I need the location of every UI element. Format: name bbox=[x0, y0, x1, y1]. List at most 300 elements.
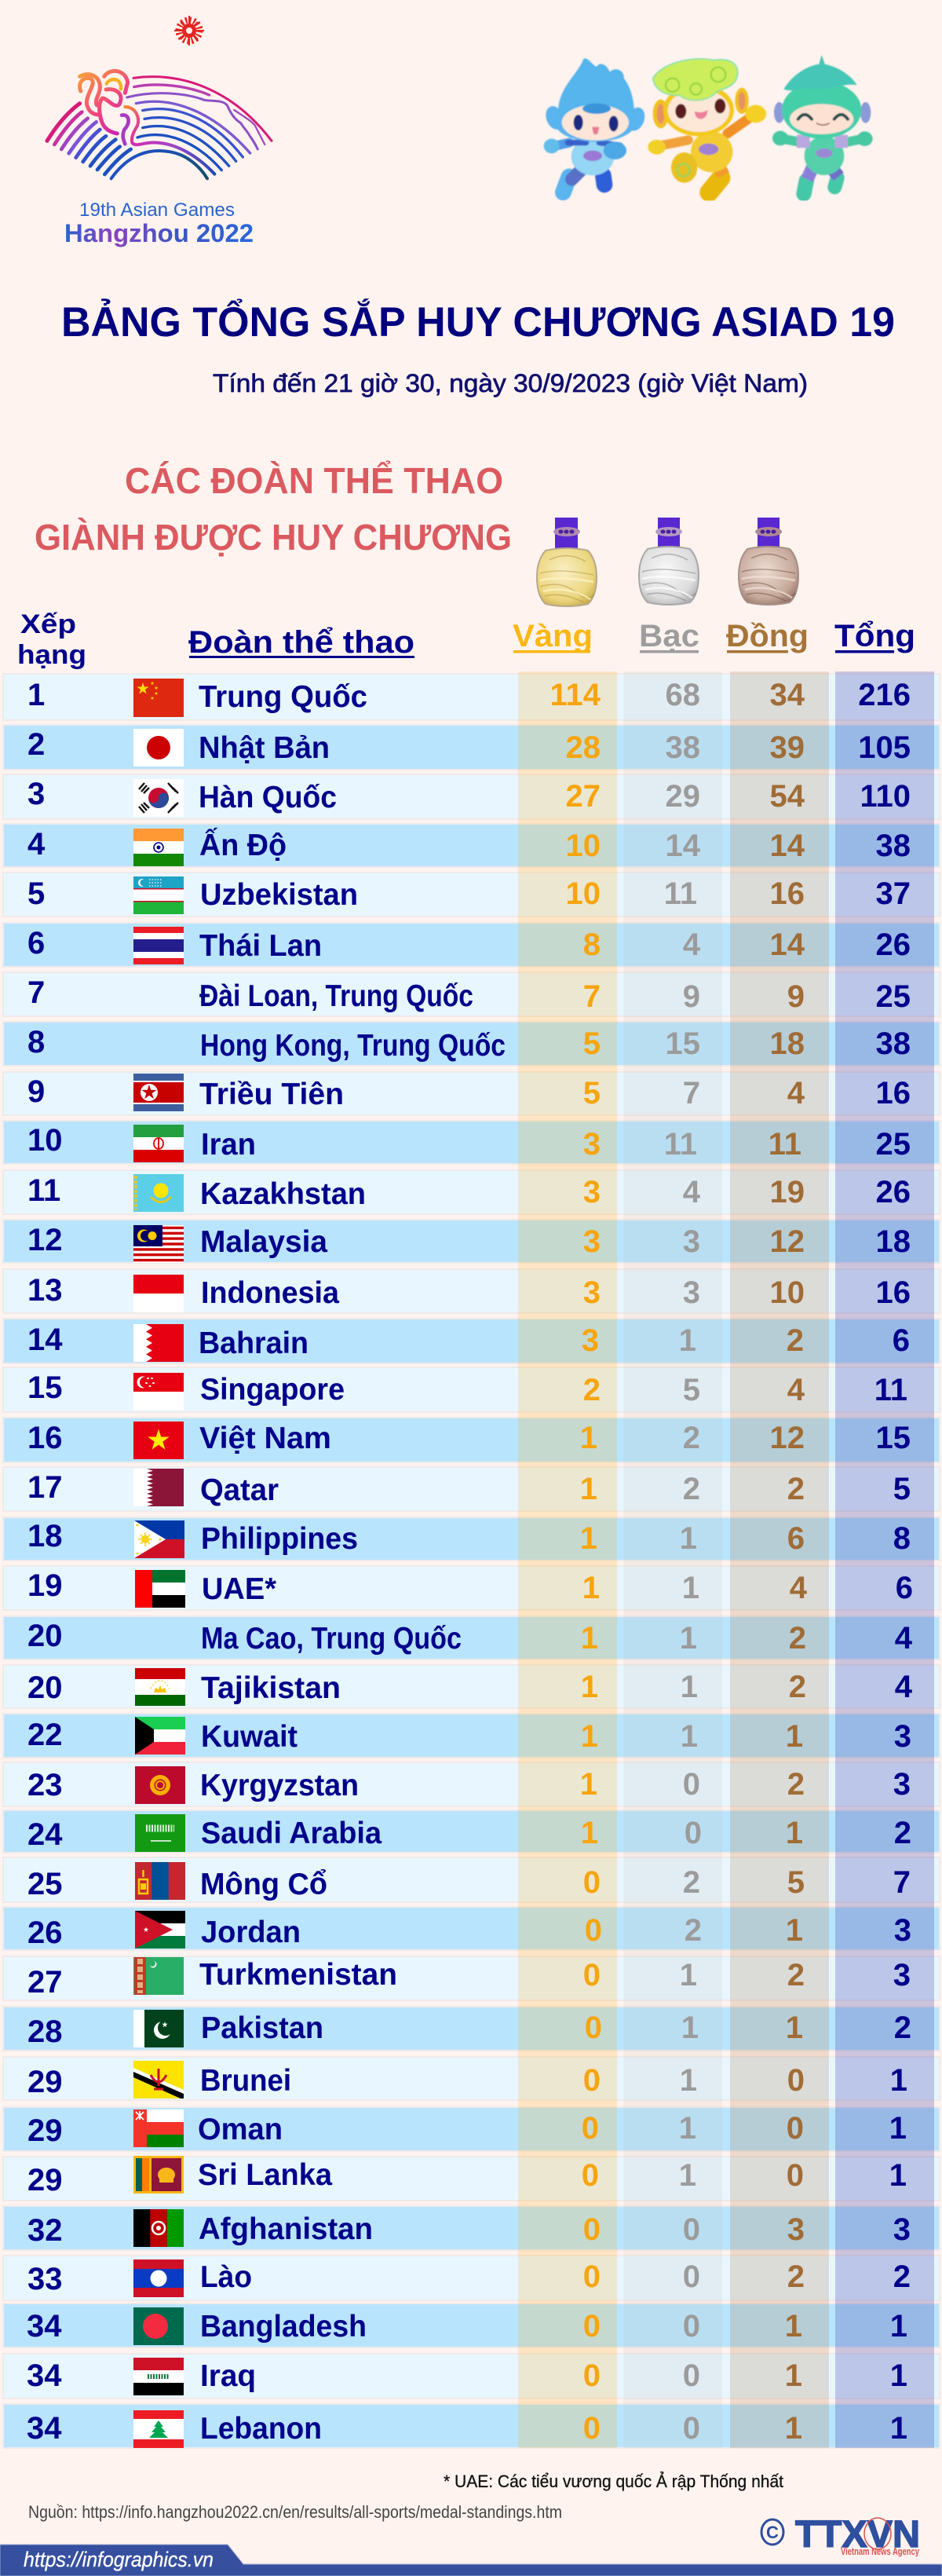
row: 19 UAE: 1 bbox=[682, 1571, 699, 1605]
row: 12 Malaysia: Malaysia bbox=[200, 1225, 327, 1259]
row: 25 Mông Cổ: 5 bbox=[787, 1865, 805, 1900]
row: 14 Bahrain bbox=[27, 1323, 910, 1362]
row: 16 Việt Nam: 2 bbox=[683, 1421, 700, 1455]
row: 27 Turkmenistan: Turkmenistan bbox=[199, 1958, 397, 1992]
row: 16 Việt Nam: Việt Nam bbox=[199, 1422, 331, 1455]
row: 34 Bangladesh: 34 bbox=[27, 2309, 62, 2344]
header: Đồng: Đồng bbox=[726, 619, 809, 653]
row: 23 Kyrgyzstan: Kyrgyzstan bbox=[200, 1769, 359, 1802]
row: 29 Oman: 0 bbox=[582, 2111, 599, 2146]
row: 22 Kuwait: 1 bbox=[681, 1719, 698, 1754]
row: 4 Ấn Độ: 14 bbox=[769, 829, 805, 863]
row: 15 Singapore: 5 bbox=[683, 1373, 700, 1407]
row: 34 Iraq: 1 bbox=[785, 2358, 802, 2393]
row: 10 Iran: Iran bbox=[201, 1128, 256, 1162]
row: 8 Hong Kong, Trung Quốc bbox=[27, 1025, 911, 1063]
header: Bạc: Bạc bbox=[639, 619, 699, 653]
row: 12 Malaysia: 3 bbox=[583, 1224, 601, 1259]
flag: Tajikistan bbox=[135, 1668, 185, 1706]
flag: Saudi Arabia bbox=[135, 1814, 185, 1852]
row: 2 Nhật Bản: 38 bbox=[666, 730, 700, 765]
flag: Turkmenistan bbox=[133, 1957, 184, 1995]
row: 32 Afghanistan: 3 bbox=[893, 2212, 911, 2247]
row: 1 Trung Quốc: 68 bbox=[666, 678, 700, 712]
table row backgrounds bbox=[3, 674, 940, 2448]
row: 11 Kazakhstan: Kazakhstan bbox=[200, 1177, 366, 1211]
row: 14 Bahrain: 14 bbox=[27, 1323, 63, 1357]
row: 28 Pakistan bbox=[27, 2010, 911, 2049]
footer bar bbox=[0, 2545, 942, 2576]
row: 20 Ma Cao, Trung Quốc: 20 bbox=[27, 1619, 63, 1653]
row: 14 Bahrain: 6 bbox=[893, 1323, 910, 1358]
row: 23 Kyrgyzstan bbox=[27, 1766, 911, 1804]
row: 18 Philippines: 6 bbox=[787, 1521, 805, 1556]
row: 8 Hong Kong, Trung Quốc: Hong Kong, Trung Quốc bbox=[200, 1029, 506, 1063]
row: 18 Philippines: 1 bbox=[680, 1521, 697, 1556]
row: 11 Kazakhstan: 4 bbox=[683, 1175, 701, 1209]
row: 29 Oman: 1 bbox=[679, 2111, 696, 2146]
row: 10 Iran: 25 bbox=[876, 1127, 911, 1162]
row: 22 Kuwait: 1 bbox=[786, 1719, 803, 1754]
row: 34 Iraq: Iraq bbox=[200, 2359, 256, 2393]
row: 29 Sri Lanka bbox=[27, 2156, 907, 2197]
row: 7 Đài Loan, Trung Quốc: Đài Loan, Trung Quốc bbox=[199, 979, 473, 1013]
row: 28 Pakistan: 2 bbox=[894, 2011, 911, 2045]
row: 5 Uzbekistan bbox=[27, 876, 911, 914]
row: 29 Brunei: 1 bbox=[890, 2063, 907, 2098]
subtitle: Tính đến 21 giờ 30, ngày 30/9/2023 (giờ Việt Nam) bbox=[213, 369, 808, 397]
row: 34 Lebanon: 34 bbox=[27, 2411, 62, 2446]
row: 23 Kyrgyzstan: 2 bbox=[787, 1767, 805, 1802]
icon: silver medal bbox=[639, 518, 699, 605]
row: 15 Singapore: 2 bbox=[583, 1373, 601, 1407]
table header bbox=[17, 609, 915, 670]
row: 13 Indonesia: 3 bbox=[583, 1275, 601, 1310]
row: 17 Qatar bbox=[27, 1469, 911, 1507]
row: 11 Kazakhstan: 19 bbox=[769, 1175, 805, 1209]
header: Xếp hạng bbox=[17, 609, 86, 670]
flag: Iran bbox=[133, 1125, 184, 1162]
row: 24 Saudi Arabia: 2 bbox=[894, 1816, 911, 1850]
flag: Laos bbox=[133, 2259, 184, 2297]
row: 4 Ấn Độ: 4 bbox=[27, 827, 46, 862]
row: 24 Saudi Arabia: Saudi Arabia bbox=[201, 1817, 382, 1850]
row: 6 Thái Lan: 6 bbox=[27, 926, 45, 961]
row: 34 Bangladesh: 1 bbox=[785, 2309, 802, 2344]
flag: Iraq bbox=[133, 2358, 184, 2395]
flag: Indonesia bbox=[133, 1275, 184, 1312]
row: 17 Qatar: 17 bbox=[27, 1470, 63, 1505]
flag: Kazakhstan bbox=[133, 1174, 184, 1212]
row: 32 Afghanistan: 0 bbox=[683, 2212, 700, 2247]
row: 25 Mông Cổ: 0 bbox=[583, 1865, 601, 1900]
row: 20 Tajikistan: 20 bbox=[27, 1670, 63, 1705]
flag: Pakistan bbox=[133, 2010, 184, 2047]
row: 13 Indonesia: Indonesia bbox=[201, 1276, 339, 1310]
row: 3 Hàn Quốc: 110 bbox=[860, 779, 911, 814]
flag: Oman bbox=[133, 2109, 184, 2147]
header: Tổng: Tổng bbox=[834, 619, 915, 653]
row: 12 Malaysia: 12 bbox=[769, 1224, 805, 1259]
row: 25 Mông Cổ: 25 bbox=[27, 1867, 63, 1901]
section heading bbox=[35, 460, 512, 558]
row: 29 Sri Lanka: Sri Lanka bbox=[198, 2158, 332, 2192]
row: 29 Brunei: Brunei bbox=[200, 2064, 291, 2098]
flag: Philippines bbox=[134, 1520, 184, 1558]
row: 16 Việt Nam: 12 bbox=[769, 1421, 805, 1455]
row: 7 Đài Loan, Trung Quốc: 7 bbox=[583, 979, 601, 1014]
row: 4 Ấn Độ bbox=[27, 827, 911, 866]
row: 27 Turkmenistan: 27 bbox=[27, 1965, 63, 2000]
row: 20 Tajikistan bbox=[27, 1668, 913, 1706]
row: 28 Pakistan: 28 bbox=[27, 2014, 63, 2049]
header: Đoàn thể thao: Đoàn thể thao bbox=[188, 625, 414, 660]
row: 3 Hàn Quốc: 29 bbox=[666, 779, 700, 814]
row: 33 Lào: 0 bbox=[583, 2259, 601, 2294]
flag: Viet Nam bbox=[133, 1422, 184, 1459]
row: 1 Trung Quốc bbox=[27, 678, 911, 717]
row: 17 Qatar: 2 bbox=[683, 1472, 700, 1506]
flag: Sri Lanka bbox=[133, 2156, 184, 2194]
row: 15 Singapore: 11 bbox=[874, 1373, 907, 1407]
flag: Japan bbox=[133, 729, 184, 767]
row: 12 Malaysia: 18 bbox=[876, 1224, 911, 1259]
flag: Bangladesh bbox=[133, 2307, 184, 2345]
row: 7 Đài Loan, Trung Quốc bbox=[27, 975, 911, 1014]
row: 20 Tajikistan: Tajikistan bbox=[201, 1671, 341, 1705]
row: 2 Nhật Bản: 39 bbox=[769, 730, 805, 765]
row: 12 Malaysia: 3 bbox=[683, 1224, 700, 1259]
flag: Afghanistan bbox=[133, 2209, 184, 2247]
row: 18 Philippines: 1 bbox=[580, 1521, 597, 1556]
row: 34 Bangladesh: 0 bbox=[683, 2309, 700, 2344]
row: 24 Saudi Arabia: 1 bbox=[581, 1816, 598, 1850]
flag: India bbox=[133, 829, 184, 866]
row: 32 Afghanistan: 3 bbox=[787, 2212, 805, 2247]
row: 20 Tajikistan: 1 bbox=[581, 1670, 598, 1704]
row: 14 Bahrain: Bahrain bbox=[199, 1326, 309, 1360]
row: 23 Kyrgyzstan: 1 bbox=[580, 1767, 597, 1802]
row: 25 Mông Cổ: 2 bbox=[683, 1865, 700, 1900]
row: 32 Afghanistan: 0 bbox=[583, 2212, 601, 2247]
row: 17 Qatar: 5 bbox=[893, 1472, 911, 1506]
row: 20 Ma Cao, Trung Quốc: 1 bbox=[680, 1621, 697, 1656]
flag: Mongolia bbox=[135, 1862, 185, 1900]
row: 13 Indonesia: 13 bbox=[27, 1273, 63, 1308]
flag: Kuwait bbox=[135, 1717, 185, 1755]
icon: Asian Games sun emblem bbox=[174, 16, 204, 46]
row: 19 UAE: 19 bbox=[27, 1568, 63, 1603]
row: 28 Pakistan: 1 bbox=[786, 2011, 803, 2045]
row: 29 Brunei: 0 bbox=[787, 2063, 805, 2098]
row: 10 Iran: 11 bbox=[664, 1127, 697, 1162]
icon: bronze medal bbox=[739, 518, 798, 605]
row: 34 Bangladesh: Bangladesh bbox=[200, 2310, 367, 2344]
footer bar: https://infographics.vn bbox=[24, 2548, 214, 2571]
row: 13 Indonesia: 3 bbox=[683, 1275, 700, 1310]
row: 23 Kyrgyzstan: 0 bbox=[683, 1767, 700, 1802]
row: 14 Bahrain: 2 bbox=[787, 1323, 804, 1358]
row: 34 Iraq: 34 bbox=[27, 2358, 62, 2393]
row: 4 Ấn Độ: 14 bbox=[666, 829, 701, 863]
row: 3 Hàn Quốc: 3 bbox=[27, 777, 45, 811]
row: 7 Đài Loan, Trung Quốc: 9 bbox=[787, 979, 805, 1014]
row: 18 Philippines: 8 bbox=[893, 1521, 911, 1556]
row: 26 Jordan: 0 bbox=[585, 1913, 602, 1948]
row: 11 Kazakhstan: 11 bbox=[27, 1173, 60, 1208]
row: 16 Việt Nam bbox=[27, 1421, 911, 1459]
row: 2 Nhật Bản: 2 bbox=[27, 727, 45, 762]
flag: Lebanon bbox=[133, 2410, 184, 2448]
row: 8 Hong Kong, Trung Quốc: 15 bbox=[666, 1026, 700, 1061]
row: 5 Uzbekistan: 16 bbox=[769, 876, 805, 911]
row: 34 Iraq bbox=[27, 2358, 907, 2395]
mascot: yellow bbox=[648, 59, 766, 192]
row: 26 Jordan: Jordan bbox=[201, 1916, 301, 1949]
row: 9 Triều Tiên: 4 bbox=[787, 1076, 805, 1111]
header: Xếp hạng: hạng bbox=[17, 640, 86, 670]
row: 25 Mông Cổ: 7 bbox=[893, 1865, 911, 1900]
source line: Nguồn: https://info.hangzhou2022.cn/en/results/all-sports/medal-standings.htm bbox=[28, 2502, 562, 2522]
row: 2 Nhật Bản: 105 bbox=[858, 730, 911, 765]
row: 29 Brunei: 1 bbox=[680, 2063, 697, 2098]
footnote: UAE: * UAE: Các tiểu vương quốc Ả rập Thống nhất bbox=[444, 2472, 783, 2491]
row: 24 Saudi Arabia: 24 bbox=[27, 1817, 63, 1852]
row: 34 Iraq: 0 bbox=[583, 2358, 601, 2393]
row: 16 Việt Nam: 15 bbox=[876, 1421, 911, 1455]
header: Vàng: Vàng bbox=[513, 619, 593, 653]
row: 5 Uzbekistan: 10 bbox=[565, 876, 601, 911]
row: 26 Jordan: 26 bbox=[27, 1916, 63, 1950]
row: 7 Đài Loan, Trung Quốc: 9 bbox=[683, 979, 700, 1014]
row: 10 Iran bbox=[27, 1123, 911, 1162]
row: 22 Kuwait bbox=[27, 1717, 911, 1755]
row: 29 Sri Lanka: 29 bbox=[27, 2163, 63, 2197]
table rows bbox=[27, 678, 913, 2448]
logo: TTXVN: TTXVN bbox=[795, 2514, 920, 2556]
row: 1 Trung Quốc: 1 bbox=[27, 678, 45, 712]
flag: Kyrgyzstan bbox=[135, 1766, 185, 1804]
row: 14 Bahrain: 1 bbox=[679, 1323, 696, 1358]
header: Xếp hạng: Xếp bbox=[20, 609, 76, 639]
flag: UAE bbox=[135, 1570, 185, 1608]
row: 27 Turkmenistan: 0 bbox=[583, 1958, 601, 1992]
section heading: CÁC ĐOÀN THỂ THAO bbox=[125, 460, 503, 501]
row: 4 Ấn Độ: Ấn Độ bbox=[199, 828, 287, 862]
row: 22 Kuwait: 22 bbox=[27, 1718, 63, 1752]
row: 18 Philippines bbox=[27, 1519, 911, 1558]
row: 33 Lào: Lào bbox=[200, 2260, 252, 2294]
row: 3 Hàn Quốc: 54 bbox=[769, 779, 805, 814]
row: 20 Tajikistan: 2 bbox=[789, 1670, 806, 1704]
row: 29 Oman: 0 bbox=[787, 2111, 804, 2146]
row: 29 Sri Lanka: 0 bbox=[787, 2158, 804, 2193]
row: 5 Uzbekistan: Uzbekistan bbox=[200, 878, 358, 912]
row: 23 Kyrgyzstan: 23 bbox=[27, 1768, 63, 1802]
row: 24 Saudi Arabia: 1 bbox=[786, 1816, 803, 1850]
row: 34 Lebanon bbox=[27, 2410, 907, 2448]
row: 29 Sri Lanka: 1 bbox=[889, 2158, 907, 2193]
row: 20 Ma Cao, Trung Quốc: 1 bbox=[581, 1621, 598, 1656]
row: 24 Saudi Arabia: 0 bbox=[685, 1816, 702, 1850]
row: 29 Oman: 29 bbox=[27, 2113, 63, 2148]
row: 1 Trung Quốc: 216 bbox=[858, 678, 911, 712]
row: 6 Thái Lan: Thái Lan bbox=[199, 929, 322, 963]
logo: TTXVN: C bbox=[766, 2523, 779, 2542]
row: 26 Jordan bbox=[27, 1911, 911, 1950]
row: 34 Lebanon: 1 bbox=[890, 2411, 907, 2446]
row: 4 Ấn Độ: 10 bbox=[565, 829, 601, 863]
row: 19 UAE bbox=[27, 1568, 913, 1608]
row: 11 Kazakhstan: 26 bbox=[876, 1175, 911, 1209]
section heading: GIÀNH ĐƯỢC HUY CHƯƠNG bbox=[35, 517, 512, 558]
row: 17 Qatar: Qatar bbox=[200, 1473, 279, 1507]
row: 34 Bangladesh: 1 bbox=[890, 2309, 907, 2344]
row: 29 Sri Lanka: 1 bbox=[679, 2158, 696, 2193]
row: 27 Turkmenistan: 1 bbox=[680, 1958, 697, 1992]
row: 9 Triều Tiên: 7 bbox=[683, 1076, 700, 1111]
flag: Qatar bbox=[133, 1469, 184, 1506]
row: 29 Brunei bbox=[27, 2061, 907, 2099]
row: 8 Hong Kong, Trung Quốc: 5 bbox=[583, 1026, 601, 1061]
row: 34 Lebanon: 0 bbox=[683, 2411, 700, 2446]
logo text: Hangzhou 2022: Hangzhou 2022 bbox=[64, 219, 254, 247]
row: 9 Triều Tiên: Triều Tiên bbox=[199, 1078, 344, 1111]
row: 6 Thái Lan: 4 bbox=[683, 928, 701, 962]
row: 29 Oman: 1 bbox=[889, 2111, 907, 2146]
row: 33 Lào bbox=[27, 2259, 911, 2297]
row: 5 Uzbekistan: 11 bbox=[664, 876, 697, 911]
row: 18 Philippines: Philippines bbox=[201, 1522, 358, 1556]
row: 6 Thái Lan: 8 bbox=[583, 928, 601, 962]
row: 34 Lebanon: Lebanon bbox=[200, 2412, 322, 2446]
row: 17 Qatar: 2 bbox=[787, 1472, 805, 1506]
row: 34 Bangladesh: 0 bbox=[583, 2309, 601, 2344]
row: 34 Lebanon: 0 bbox=[583, 2411, 601, 2446]
medal column overlays bbox=[518, 671, 934, 2448]
row: 19 UAE: UAE* bbox=[202, 1572, 277, 1606]
icon: gold medal bbox=[537, 518, 597, 606]
row: 33 Lào: 2 bbox=[787, 2259, 805, 2294]
row: 2 Nhật Bản bbox=[27, 727, 911, 767]
row: 6 Thái Lan: 14 bbox=[769, 928, 805, 962]
row: 22 Kuwait: 1 bbox=[581, 1719, 598, 1754]
flag: Uzbekistan bbox=[133, 876, 184, 914]
row: 8 Hong Kong, Trung Quốc: 18 bbox=[769, 1026, 805, 1061]
mascot: green bbox=[772, 55, 873, 194]
row: 9 Triều Tiên: 16 bbox=[876, 1076, 911, 1111]
row: 10 Iran: 10 bbox=[27, 1123, 63, 1158]
flag: Brunei bbox=[133, 2061, 184, 2098]
row: 13 Indonesia: 16 bbox=[876, 1275, 911, 1310]
row: 10 Iran: 3 bbox=[583, 1127, 601, 1162]
flag: South Korea bbox=[133, 779, 184, 817]
flag: North Korea bbox=[133, 1074, 184, 1111]
row: 34 Bangladesh bbox=[27, 2307, 907, 2345]
row: 33 Lào: 0 bbox=[683, 2259, 700, 2294]
row: 9 Triều Tiên: 5 bbox=[583, 1076, 601, 1111]
mascot: blue bbox=[542, 58, 648, 192]
row: 19 UAE: 6 bbox=[896, 1571, 913, 1605]
row: 3 Hàn Quốc: Hàn Quốc bbox=[199, 781, 337, 814]
row: 1 Trung Quốc: 114 bbox=[550, 678, 601, 712]
row: 22 Kuwait: Kuwait bbox=[201, 1720, 298, 1754]
row: 13 Indonesia bbox=[27, 1273, 911, 1312]
row: 26 Jordan: 3 bbox=[894, 1913, 911, 1948]
flag: Singapore bbox=[133, 1373, 184, 1411]
row: 28 Pakistan: Pakistan bbox=[201, 2011, 323, 2045]
title: BẢNG TỔNG SẮP HUY CHƯƠNG ASIAD 19 bbox=[61, 298, 895, 346]
row: 29 Brunei: 29 bbox=[27, 2065, 63, 2099]
flag: Jordan bbox=[135, 1911, 185, 1948]
row: 15 Singapore: Singapore bbox=[200, 1373, 345, 1407]
row: 32 Afghanistan bbox=[27, 2209, 911, 2248]
row: 20 Ma Cao, Trung Quốc: 4 bbox=[895, 1621, 913, 1656]
row: 25 Mông Cổ bbox=[27, 1862, 911, 1901]
row: 15 Singapore: 4 bbox=[787, 1373, 805, 1407]
row: 18 Philippines: 18 bbox=[27, 1519, 63, 1553]
row: 13 Indonesia: 10 bbox=[769, 1275, 805, 1310]
row: 32 Afghanistan: Afghanistan bbox=[199, 2212, 373, 2246]
row: 11 Kazakhstan bbox=[27, 1173, 911, 1212]
row: 20 Tajikistan: 4 bbox=[895, 1670, 913, 1704]
row: 24 Saudi Arabia bbox=[27, 1814, 911, 1852]
row: 29 Sri Lanka: 0 bbox=[582, 2158, 599, 2193]
row: 29 Brunei: 0 bbox=[583, 2063, 601, 2098]
row: 12 Malaysia: 12 bbox=[27, 1223, 63, 1257]
row: 27 Turkmenistan bbox=[27, 1957, 911, 2000]
row: 1 Trung Quốc: 34 bbox=[769, 678, 805, 712]
row: 19 UAE: 1 bbox=[582, 1571, 600, 1605]
row: 26 Jordan: 1 bbox=[786, 1913, 803, 1948]
flag: China bbox=[133, 679, 184, 717]
row: 33 Lào: 33 bbox=[27, 2262, 63, 2296]
row: 16 Việt Nam: 1 bbox=[580, 1421, 597, 1455]
row: 12 Malaysia bbox=[27, 1223, 911, 1263]
row: 14 Bahrain: 3 bbox=[582, 1323, 599, 1358]
row: 20 Ma Cao, Trung Quốc: 2 bbox=[789, 1621, 806, 1656]
illustration: three mascots bbox=[542, 55, 873, 194]
row: 17 Qatar: 1 bbox=[580, 1472, 597, 1506]
row: 28 Pakistan: 1 bbox=[681, 2011, 699, 2045]
row: 7 Đài Loan, Trung Quốc: 25 bbox=[876, 979, 911, 1014]
row: 29 Oman bbox=[27, 2109, 907, 2148]
row: 27 Turkmenistan: 2 bbox=[787, 1958, 805, 1992]
row: 34 Iraq: 1 bbox=[890, 2358, 907, 2393]
flag: Bahrain bbox=[133, 1324, 184, 1362]
row: 34 Iraq: 0 bbox=[683, 2358, 700, 2393]
row: 19 UAE: 4 bbox=[790, 1571, 808, 1605]
row: 3 Hàn Quốc: 27 bbox=[565, 779, 601, 814]
row: 33 Lào: 2 bbox=[893, 2259, 911, 2294]
row: 34 Lebanon: 1 bbox=[785, 2411, 802, 2446]
row: 7 Đài Loan, Trung Quốc: 7 bbox=[27, 975, 45, 1010]
row: 20 Ma Cao, Trung Quốc: Ma Cao, Trung Quốc bbox=[201, 1622, 462, 1656]
row: 15 Singapore bbox=[27, 1370, 907, 1411]
row: 5 Uzbekistan: 37 bbox=[876, 876, 911, 911]
row: 15 Singapore: 15 bbox=[27, 1370, 63, 1405]
row: 16 Việt Nam: 16 bbox=[27, 1421, 63, 1455]
row: 9 Triều Tiên bbox=[27, 1074, 911, 1111]
flag: Thailand bbox=[133, 927, 184, 964]
row: 2 Nhật Bản: Nhật Bản bbox=[199, 731, 330, 765]
row: 20 Ma Cao, Trung Quốc bbox=[27, 1619, 913, 1656]
logo text: 19th Asian Games: 19th Asian Games bbox=[79, 199, 235, 221]
row: 20 Tajikistan: 1 bbox=[681, 1670, 698, 1704]
row: 9 Triều Tiên: 9 bbox=[27, 1074, 45, 1109]
row: 8 Hong Kong, Trung Quốc: 38 bbox=[876, 1026, 911, 1061]
row: 22 Kuwait: 3 bbox=[894, 1719, 911, 1754]
